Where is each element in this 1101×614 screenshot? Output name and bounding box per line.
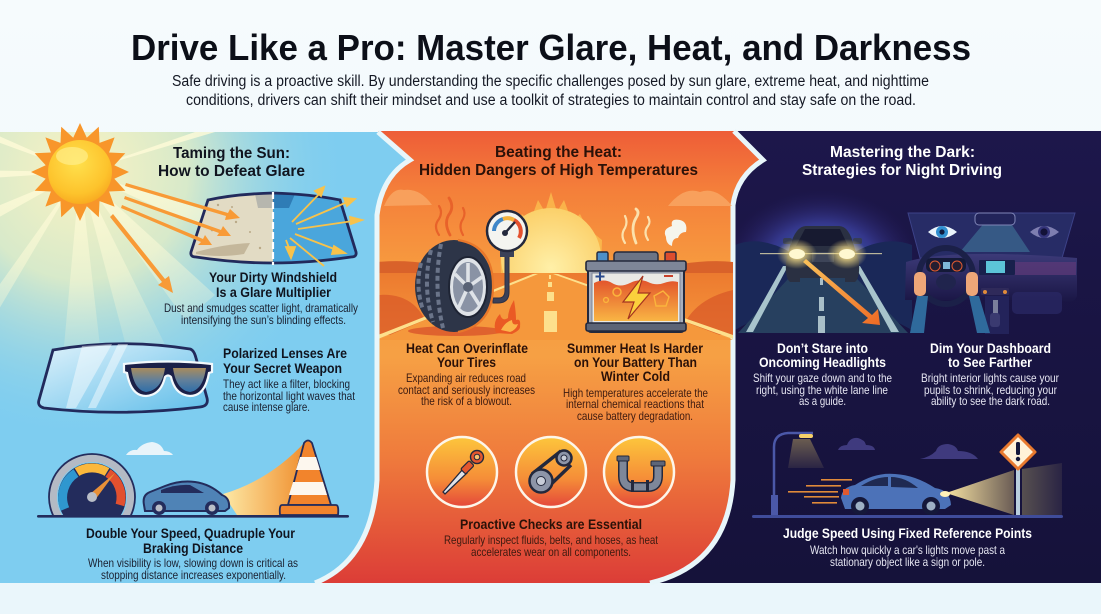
icon: warning sign	[1001, 435, 1035, 515]
block: overinflate tires	[398, 340, 535, 408]
heading: beating the heat: Hidden Dangers of High Temperatures	[419, 162, 698, 179]
block: judge speed	[783, 525, 1032, 569]
block: proactive checks: Proactive Checks are Essential	[460, 516, 642, 532]
block: dim dashboard: ability to see the dark road.	[931, 395, 1050, 408]
panel: heat	[315, 131, 763, 583]
icon: belt and pulleys	[516, 437, 586, 507]
car	[841, 474, 951, 515]
block: proactive checks: accelerates wear on all components.	[471, 546, 631, 559]
block: overinflate tires: Your Tires	[437, 354, 496, 370]
headlight beam	[223, 442, 305, 515]
block: summer battery: Winter Cold	[601, 368, 670, 384]
block: dont stare: Oncoming Headlights	[759, 354, 886, 370]
block: polarized lenses: Polarized Lenses Are	[223, 345, 347, 361]
heat scene background	[378, 190, 733, 340]
icon: tire with gauge	[408, 198, 527, 336]
icon: sun	[31, 123, 129, 221]
icon: heat waves	[436, 198, 464, 235]
heading: beating the heat	[419, 144, 698, 179]
intro text	[172, 73, 929, 109]
heading: taming the sun: Taming the Sun:	[173, 145, 290, 162]
intro text: Safe driving is a proactive skill. By understanding the specific challenges posed by sun glare, extreme heat, and nighttime	[172, 73, 929, 90]
icon: hands on wheel	[910, 272, 990, 333]
icon: traffic cone	[280, 440, 338, 515]
icon: headlight flare	[760, 239, 882, 269]
arrows: sun rays hitting glass	[110, 183, 240, 293]
heading: mastering the dark: Mastering the Dark:	[830, 144, 975, 161]
block: judge speed: Watch how quickly a car's lights move past a	[810, 544, 1005, 557]
block: polarized lenses: the horizontal light waves that	[223, 390, 356, 403]
block: double speed: Double Your Speed, Quadruple Your	[86, 525, 295, 541]
icon: sunglasses	[124, 362, 212, 396]
icon: windshield	[191, 187, 362, 266]
intro text: conditions, drivers can shift their mindset and use a toolkit of strategies to maintain control and stay safe on the road.	[186, 92, 916, 109]
block: dirty windshield: intensifying the sun’s blinding effects.	[181, 314, 346, 327]
block: dirty windshield: Dust and smudges scatter light, dramatically	[164, 302, 358, 315]
block: proactive checks	[444, 516, 659, 559]
block: summer battery: on Your Battery Than	[574, 354, 697, 370]
block: summer battery: cause battery degradation.	[577, 410, 693, 423]
arrow: shift gaze	[803, 259, 880, 325]
heading: taming the sun	[158, 145, 305, 180]
block: polarized lenses: cause intense glare.	[223, 401, 310, 414]
icon: battery	[586, 209, 686, 332]
block: overinflate tires: contact and seriously increases	[398, 384, 535, 397]
sun rays	[0, 132, 215, 347]
headlight beam	[946, 470, 1014, 515]
block: dont stare: right, using the white lane line	[756, 384, 888, 397]
cloud	[126, 442, 173, 455]
block: dont stare: Shift your gaze down and to the	[753, 372, 892, 385]
heading: mastering the dark	[802, 144, 1002, 179]
icon: speed lines	[788, 479, 852, 504]
block: dont stare	[753, 340, 892, 408]
illustration: oncoming headlights	[724, 183, 920, 333]
block: overinflate tires: Expanding air reduces road	[406, 372, 526, 385]
block: dont stare: as a guide.	[799, 395, 846, 408]
block: proactive checks: Regularly inspect fluids, belts, and hoses, as heat	[444, 534, 659, 547]
block: judge speed: stationary object like a sign or pole.	[830, 556, 985, 569]
block: dim dashboard: to See Farther	[948, 354, 1032, 370]
block: dirty windshield	[164, 269, 358, 327]
block: summer battery: internal chemical reactions that	[566, 398, 705, 411]
heading: beating the heat: Beating the Heat:	[495, 144, 622, 161]
block: polarized lenses	[223, 345, 356, 414]
icon: speedometer	[48, 453, 136, 515]
block: summer battery: High temperatures accelerate the	[563, 387, 708, 400]
block: dim dashboard: Bright interior lights cause your	[921, 372, 1059, 385]
block: overinflate tires: Heat Can Overinflate	[406, 340, 528, 356]
icon: hose	[604, 437, 674, 507]
icon: car	[144, 482, 229, 515]
block: double speed: When visibility is low, slowing down is critical as	[88, 557, 298, 570]
illustration: car passing sign at night	[752, 433, 1063, 518]
icon: bright eye	[928, 226, 957, 238]
block: dirty windshield: Is a Glare Multiplier	[216, 284, 331, 300]
panel: glare	[0, 123, 410, 583]
block: judge speed: Judge Speed Using Fixed Reference Points	[783, 525, 1032, 541]
block: overinflate tires: the risk of a blowout.	[421, 395, 512, 408]
heading: mastering the dark: Strategies for Night Driving	[802, 162, 1002, 179]
block: summer battery	[563, 340, 708, 423]
block: polarized lenses: They act like a filter, blocking	[223, 378, 350, 391]
heading: taming the sun: How to Defeat Glare	[158, 163, 305, 180]
block: dirty windshield: Your Dirty Windshield	[209, 269, 337, 285]
block: double speed: Braking Distance	[143, 540, 243, 556]
icon: dipstick	[427, 437, 497, 507]
icon: street lamp	[771, 433, 824, 516]
illustration: braking distance	[37, 440, 349, 518]
icon: dim eye	[1030, 226, 1059, 238]
cloud	[838, 438, 875, 450]
illustration: dashboard	[905, 213, 1077, 334]
block: dim dashboard: Dim Your Dashboard	[930, 340, 1051, 356]
block: polarized lenses: Your Secret Weapon	[223, 360, 342, 376]
far beam	[1022, 463, 1062, 515]
block: dim dashboard	[921, 340, 1059, 408]
block: double speed	[86, 525, 298, 582]
block: summer battery: Summer Heat Is Harder	[567, 340, 703, 356]
panel: dark night	[640, 131, 1101, 583]
block: dim dashboard: pupils to shrink, reducing your	[924, 384, 1057, 397]
block: double speed: stopping distance increases exponentially.	[101, 569, 286, 582]
title: Drive Like a Pro: Master Glare, Heat, and Darkness	[131, 27, 971, 68]
cloud	[920, 444, 978, 459]
icon: mirror windshield with sunglasses	[39, 344, 212, 412]
starburst reflections	[286, 187, 362, 266]
block: dont stare: Don’t Stare into	[777, 340, 868, 356]
